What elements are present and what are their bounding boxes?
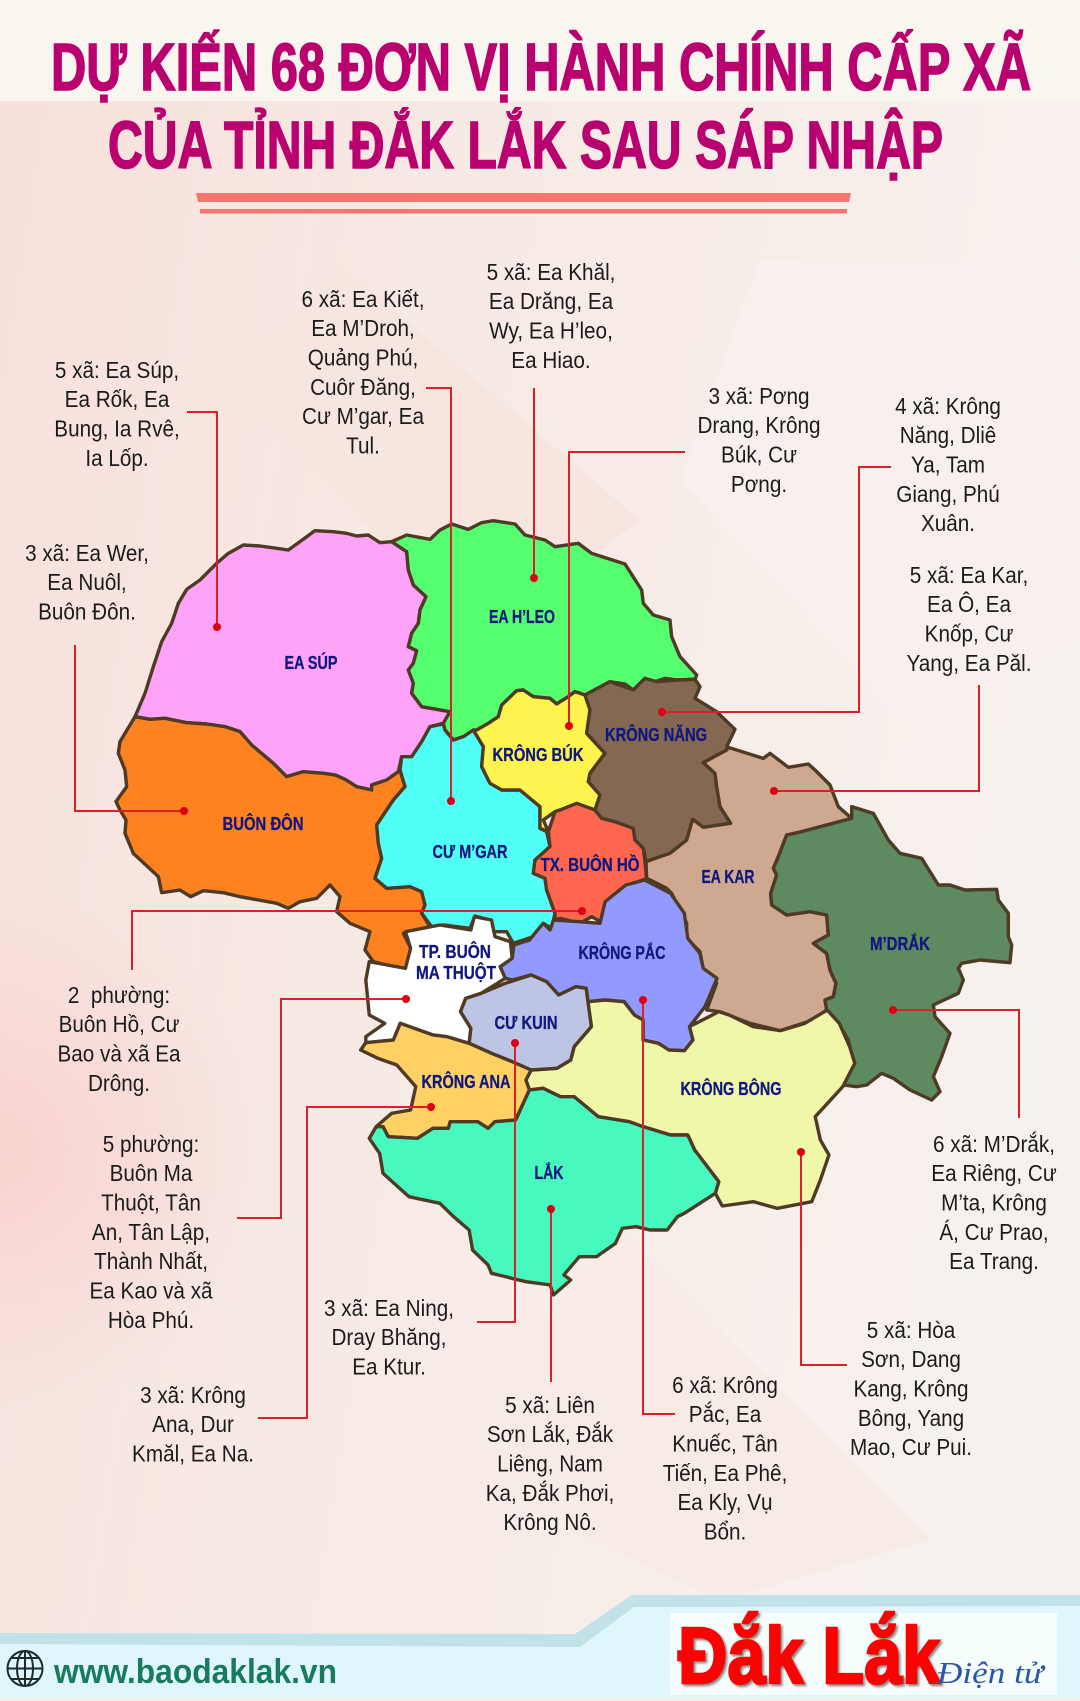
district: Krông Ana: KRÔNG ANA [422,1071,510,1092]
district: Krông Pắc [500,880,717,1051]
district: Lắk: LẮK [534,1162,564,1183]
text: Cư M'gar communes: Ea M’Droh, [311,315,415,341]
text: Krông Ana communes: Kmăl, Ea Na. [132,1440,254,1467]
district: Ea Kar: EA KAR [702,867,754,887]
leader: Krông Pắc [639,996,675,1414]
text: Krông Pắc communes: Tiến, Ea Phê, [663,1460,787,1486]
district: Ea Súp [135,531,450,790]
text: TX. Buôn Hồ wards: Buôn Hồ, Cư [59,1011,179,1037]
text: Lắk communes: Sơn Lắk, Đắk [487,1421,613,1447]
district: Cư Kuin [461,975,591,1070]
district: Krông Ana [361,1023,531,1138]
district: TX. Buôn Hồ [533,803,647,923]
leader: TP. Buôn Ma Thuột [237,995,410,1218]
district: TP. Buôn Ma Thuột: MA THUỘT [416,962,496,983]
district: TP. Buôn Ma Thuột: TP. BUÔN [419,941,491,962]
text: Cư Kuin communes: Ea Ktur. [352,1353,426,1380]
text: Krông Búk communes: Drang, Krông [697,412,821,438]
text: Buôn Đôn communes: Buôn Đôn. [38,598,136,625]
text: Krông Pắc communes: Knuếc, Tân [672,1430,778,1457]
text: Ea Kar communes: Knốp, Cư [925,620,1013,647]
leader: Cư Kuin [477,1039,519,1322]
district: Krông Pắc: KRÔNG PẮC [578,942,666,963]
text: Ea H'Leo communes: Ea Hiao. [511,347,591,373]
text: TP. Buôn Ma Thuột wards: 5 phường: [103,1131,199,1157]
text: Ea H'Leo communes: Wy, Ea H’leo, [489,317,613,344]
district: Krông Bông [526,1000,855,1208]
text: Krông Búk communes: Búk, Cư [721,441,797,468]
district: Ea H'Leo: EA H’LEO [489,607,555,627]
district: Krông Búk [473,690,605,832]
text: Cư Kuin communes: 3 xã: Ea Ning, [324,1295,454,1321]
text: Lắk communes: 5 xã: Liên [505,1392,595,1418]
title [51,30,1031,183]
text: Ea H'Leo communes: Ea Drăng, Ea [489,288,614,314]
leader: Krông Búk [565,452,685,730]
district: Krông Búk: KRÔNG BÚK [492,744,584,765]
text: TP. Buôn Ma Thuột wards: Thuột, Tân [101,1189,201,1216]
text: Krông Bông communes: 5 xã: Hòa [867,1317,956,1343]
text: Krông Năng communes: Xuân. [921,510,975,536]
map of districts [116,521,1012,1295]
text: TP. Buôn Ma Thuột wards: Buôn Ma [110,1160,193,1186]
text: Ea Súp communes: Bung, Ia Rvê, [54,415,180,442]
text: Krông Búk communes: Pơng. [731,471,787,497]
text: TX. Buôn Hồ wards: Drông. [88,1070,150,1096]
text: Cư M'gar communes: Cư M’gar, Ea [302,403,425,429]
leader: Buôn Đôn [75,645,188,815]
leader lines and dots [75,388,1019,1418]
district: M'Drắk [771,807,1012,1100]
logo: Đắk Lắk Điện tử: Đắk Lắk [678,1611,940,1700]
district: Cư Kuin: CƯ KUIN [494,1013,558,1033]
text: TP. Buôn Ma Thuột wards: Hòa Phú. [108,1307,194,1333]
text: Buôn Đôn communes: Ea Nuôl, [47,569,127,595]
district: Krông Bông: KRÔNG BÔNG [680,1078,782,1099]
text: Krông Búk communes: 3 xã: Pơng [708,383,810,409]
district: Cư M'gar: CƯ M’GAR [432,842,508,862]
district: Ea Súp: EA SÚP [284,652,338,673]
text: M'Drắk communes: Ea Riêng, Cư [931,1160,1057,1186]
text: TX. Buôn Hồ wards: Bao và xã Ea [57,1040,181,1067]
district: Krông Năng [585,678,735,862]
leader: M'Drắk [889,1006,1019,1118]
text: Krông Pắc communes: Ea Kly, Vụ [677,1489,773,1515]
text: Cư M'gar communes: Quảng Phú, [308,344,418,371]
text: Ea Kar communes: Ea Ô, Ea [927,591,1012,617]
website url: www.baodaklak.vn [53,1653,337,1691]
district: TX. Buôn Hồ: TX. BUÔN HỒ [540,854,640,875]
district: Buôn Đôn: BUÔN ĐÔN [222,813,304,834]
text: TP. Buôn Ma Thuột wards: Ea Kao và xã [89,1277,213,1304]
text: Krông Pắc communes: 6 xã: Krông [672,1372,778,1398]
text: Cư M'gar communes: Tul. [346,432,380,459]
district: M'Drắk: M’DRẮK [870,933,930,954]
text: TP. Buôn Ma Thuột wards: An, Tân Lập, [92,1219,210,1245]
text: Krông Bông communes: Sơn, Dang [861,1346,961,1372]
text: Krông Ana communes: 3 xã: Krông [140,1382,246,1408]
district: Lắk [369,1088,719,1295]
text: Krông Pắc communes: Bổn. [704,1518,746,1545]
leader: Krông Bông [797,1148,847,1365]
text: Ea H'Leo communes: 5 xã: Ea Khăl, [487,259,615,285]
text: Buôn Đôn communes: 3 xã: Ea Wer, [25,540,149,566]
district: TP. Buôn Ma Thuột [366,917,512,1043]
leader: Ea Kar [770,685,979,795]
text: M'Drắk communes: M’ta, Krông [941,1189,1047,1216]
text: Ea Kar communes: 5 xã: Ea Kar, [910,562,1028,588]
text: Cư Kuin communes: Dray Bhăng, [331,1324,447,1350]
text: Ea Súp communes: Ia Lốp. [85,445,149,471]
title underline [196,193,851,214]
text: M'Drắk communes: 6 xã: M’Drắk, [933,1131,1055,1157]
district: Ea H'Leo [392,521,697,740]
leader: Ea H'Leo [530,388,538,582]
district: Krông Năng: KRÔNG NĂNG [605,724,707,745]
text: Lắk communes: Ka, Đắk Phơi, [486,1480,614,1506]
text: Lắk communes: Liêng, Nam [497,1450,603,1477]
text: Krông Pắc communes: Pắc, Ea [689,1401,762,1427]
text: M'Drắk communes: Á, Cư Prao, [939,1219,1049,1245]
district: Buôn Đôn [116,717,430,970]
text: M'Drắk communes: Ea Trang. [949,1248,1039,1274]
footer band [0,1595,1080,1701]
district: Ea Kar [646,747,852,1031]
leader: Krông Năng [658,467,891,716]
text: Ea Súp communes: 5 xã: Ea Súp, [55,357,179,383]
text: Krông Bông communes: Mao, Cư Pui. [850,1434,972,1460]
icon: globe [8,1651,42,1686]
text: Lắk communes: Krông Nô. [503,1509,597,1535]
text: Krông Năng communes: Giang, Phú [896,481,1000,507]
text: Krông Ana communes: Ana, Dur [152,1411,234,1437]
leader: Lắk [547,1205,555,1382]
text: TX. Buôn Hồ wards: 2 phường: [68,982,170,1008]
district: Cư M'gar [375,724,555,943]
text: Cư M'gar communes: 6 xã: Ea Kiết, [301,286,425,312]
text: Cư M'gar communes: Cuôr Đăng, [310,374,416,400]
text: TP. Buôn Ma Thuột wards: Thành Nhất, [94,1248,208,1274]
text: Ea Súp communes: Ea Rốk, Ea [65,386,170,412]
text: Krông Bông communes: Bông, Yang [858,1405,964,1431]
leader: Ea Súp [187,412,221,631]
leader: Cư M'gar [426,388,455,805]
leader: Krông Ana [258,1103,435,1418]
text: Krông Năng communes: Năng, Dliê [900,422,996,448]
text: Krông Năng communes: Ya, Tam [911,451,985,478]
text: Krông Bông communes: Kang, Krông [853,1375,969,1402]
logo: Đắk Lắk Điện tử: Điện tử [936,1655,1045,1690]
leader: TX. Buôn Hồ [132,907,586,970]
text: Krông Năng communes: 4 xã: Krông [895,393,1001,419]
text: Ea Kar communes: Yang, Ea Păl. [906,650,1032,676]
